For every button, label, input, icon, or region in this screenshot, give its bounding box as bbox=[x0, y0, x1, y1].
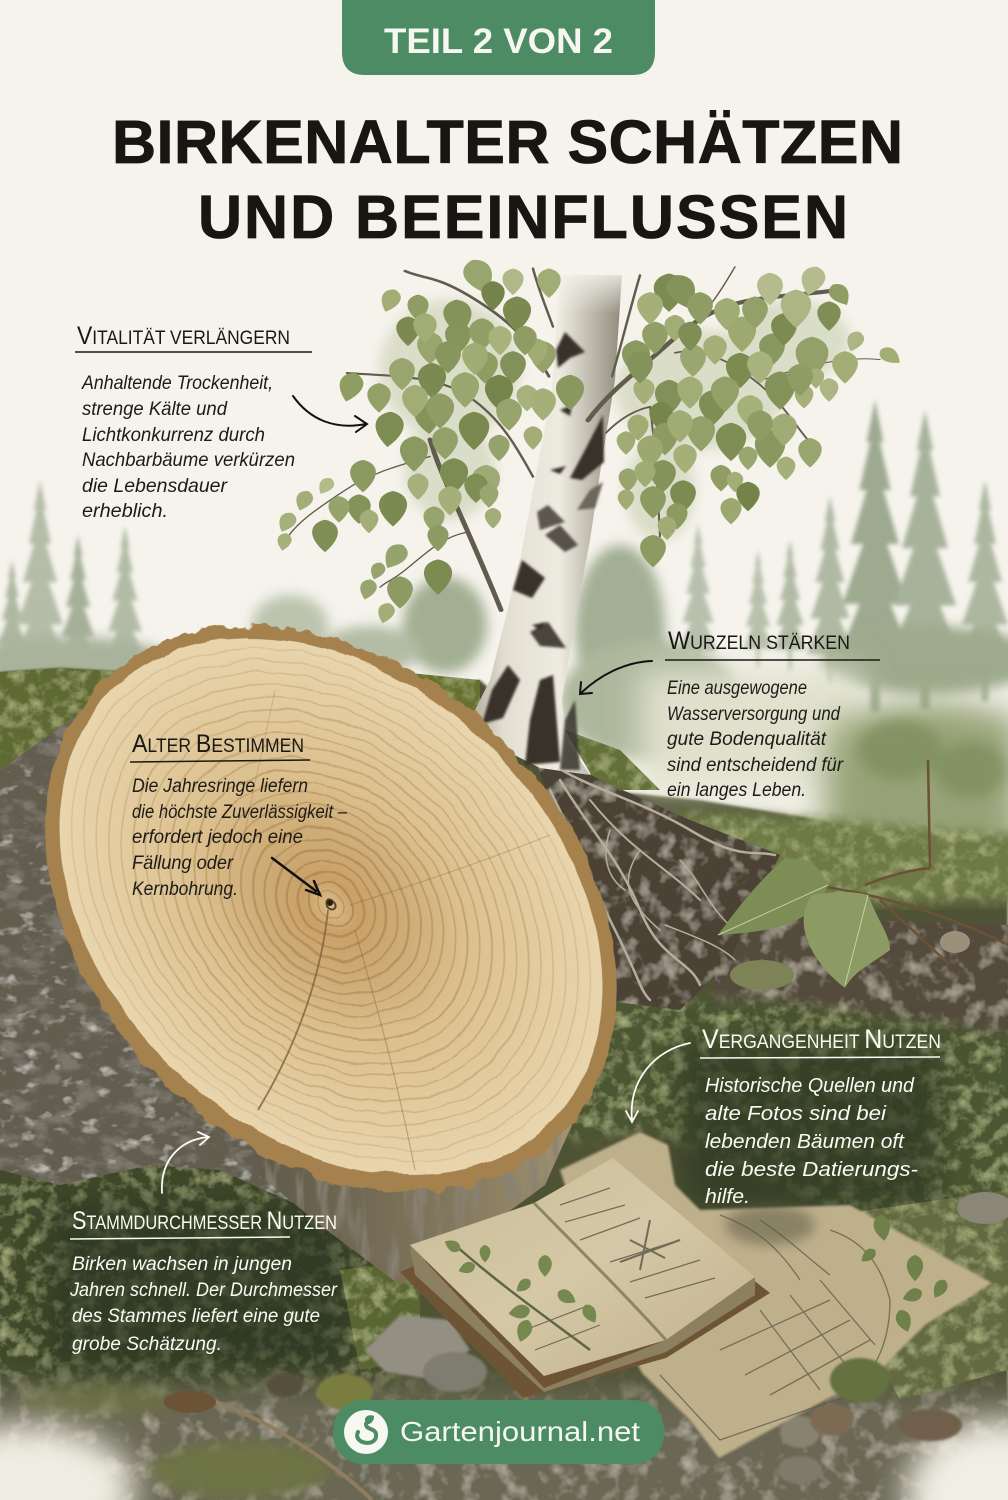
callout: Stammdurchmesser nutzen bbox=[69, 1132, 338, 1355]
hill with saplings bbox=[820, 702, 1008, 860]
callout: Wurzeln stärken: sind entscheidend für bbox=[667, 755, 844, 776]
illustration: birch tree bbox=[274, 256, 905, 775]
radial cracks bbox=[240, 690, 550, 1170]
callout: Vitalität verlängern: Nachbarbäume verkürzen bbox=[82, 450, 295, 471]
callout: Vitalität verlängern: Lichtkonkurrenz durch bbox=[82, 425, 265, 446]
callout: Vitalität verlängern: erheblich. bbox=[82, 501, 168, 522]
badge: part label: TEIL 2 VON 2 bbox=[384, 22, 613, 61]
illustration: moss and ground bbox=[0, 668, 1008, 1500]
callout: Stammdurchmesser nutzen: Birken wachsen in jungen bbox=[72, 1254, 292, 1275]
illustration: large foreground leaves bbox=[718, 760, 1008, 1224]
callout: Alter bestimmen: erfordert jedoch eine bbox=[132, 827, 303, 848]
callout: Vergangenheit nutzen: VERGANGENHEIT NUTZEN bbox=[702, 1024, 941, 1054]
map sheet bbox=[560, 1132, 992, 1458]
callout: Alter bestimmen: Fällung oder bbox=[132, 853, 234, 874]
callout: Vitalität verlängern: die Lebensdauer bbox=[82, 476, 228, 497]
title: BIRKENALTER SCHÄTZEN bbox=[112, 108, 903, 176]
callout: Alter bestimmen: die höchste Zuverlässigkeit – bbox=[132, 802, 347, 823]
illustration: rocks bbox=[267, 1315, 962, 1484]
callout: Alter bestimmen bbox=[130, 730, 347, 906]
callout: Vitalität verlängern: Anhaltende Trockenheit, bbox=[81, 373, 273, 394]
callout: Wurzeln stärken: WURZELN STÄRKEN bbox=[668, 627, 850, 655]
callout: Vergangenheit nutzen: lebenden Bäumen oft bbox=[705, 1131, 906, 1153]
callout: Vergangenheit nutzen: die beste Datierungs- bbox=[705, 1159, 918, 1181]
ground base bbox=[0, 668, 1008, 1500]
callout: Alter bestimmen: ALTER BESTIMMEN bbox=[132, 730, 304, 758]
illustration: tree ring slice bbox=[0, 512, 730, 1306]
slice outer edge bbox=[0, 512, 730, 1306]
footer: brand pill bbox=[333, 1400, 664, 1464]
callout: Vitalität verlängern: strenge Kälte und bbox=[82, 399, 228, 420]
title bbox=[112, 108, 903, 251]
growth rings bbox=[0, 545, 693, 1265]
callout: Stammdurchmesser nutzen: Jahren schnell. Der Durchmesser bbox=[69, 1280, 338, 1301]
callout: Vergangenheit nutzen: hilfe. bbox=[705, 1186, 750, 1208]
soil and stones bbox=[710, 915, 1008, 1040]
illustration: far forest bbox=[0, 400, 1008, 760]
icon: sprout logo bbox=[344, 1410, 388, 1454]
twig lower left bbox=[205, 1398, 372, 1500]
arrow: to trunk edge bbox=[162, 1132, 209, 1193]
book writing and plant bbox=[525, 1188, 715, 1350]
ground bottom bbox=[0, 1360, 1008, 1500]
callout: Vergangenheit nutzen: alte Fotos sind bei bbox=[705, 1103, 887, 1125]
callout: Alter bestimmen: Die Jahresringe liefern bbox=[132, 776, 308, 797]
callout: Vitalität verlängern: VITALITÄT VERLÄNGERN bbox=[77, 322, 290, 350]
arrow: to foliage bbox=[293, 396, 367, 432]
callout: Vitalität verlängern bbox=[75, 322, 367, 522]
callout: Wurzeln stärken bbox=[580, 627, 880, 801]
callout: Wurzeln stärken: Eine ausgewogene bbox=[667, 678, 807, 699]
footer: brand pill: Gartenjournal.net bbox=[400, 1416, 640, 1447]
callout: Wurzeln stärken: Wasserversorgung und bbox=[667, 704, 841, 725]
callout: Stammdurchmesser nutzen: des Stammes liefert eine gute bbox=[72, 1306, 320, 1327]
arrow: to pith bbox=[272, 858, 320, 895]
callout: Alter bestimmen: Kernbohrung. bbox=[132, 879, 238, 900]
callout: Wurzeln stärken: ein langes Leben. bbox=[667, 780, 806, 801]
arrow: to roots bbox=[580, 661, 652, 694]
callout: Vergangenheit nutzen: Historische Quellen und bbox=[705, 1075, 915, 1097]
open book bbox=[400, 1158, 770, 1398]
callout: Stammdurchmesser nutzen: STAMMDURCHMESSER NUTZEN bbox=[72, 1207, 337, 1235]
moss left bbox=[0, 1165, 401, 1393]
branches and foliage bbox=[274, 256, 905, 625]
title: UND BEEINFLUSSEN bbox=[198, 183, 848, 251]
moss right bbox=[568, 992, 1008, 1211]
illustration: roots bbox=[530, 740, 780, 1010]
foliage wash bbox=[380, 300, 850, 540]
callout: Stammdurchmesser nutzen: grobe Schätzung. bbox=[72, 1334, 222, 1355]
fog behind right callout bbox=[640, 670, 860, 790]
callout: Vergangenheit nutzen bbox=[626, 1024, 941, 1208]
illustration: stump bark side bbox=[0, 680, 600, 1285]
illustration: old map and book bbox=[400, 1132, 992, 1458]
trunk bbox=[465, 268, 630, 775]
badge: part label bbox=[342, 0, 655, 75]
callout: Wurzeln stärken: gute Bodenqualität bbox=[667, 729, 827, 750]
arrow: to book bbox=[626, 1043, 690, 1122]
